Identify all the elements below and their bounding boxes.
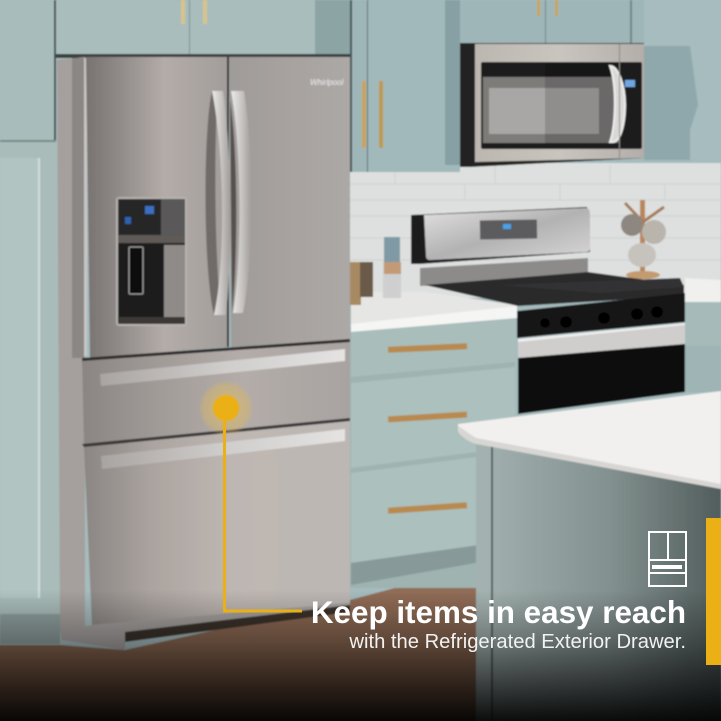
base cabinets	[350, 302, 721, 588]
brand logo: Whirlpool	[310, 78, 344, 87]
icon: fridge with drawers	[649, 532, 686, 586]
water and ice dispenser	[116, 197, 187, 326]
island countertop	[458, 391, 721, 488]
countertop items	[350, 237, 401, 305]
island cabinet face	[476, 440, 721, 721]
upper cabinets	[54, 0, 721, 172]
cabinet pulls	[181, 0, 558, 148]
toe kick	[60, 603, 350, 650]
mug tree	[621, 200, 666, 279]
microwave	[460, 43, 644, 167]
countertop	[351, 278, 721, 332]
upper left door	[86, 57, 228, 358]
door handles	[205, 91, 251, 315]
upper right door	[229, 57, 350, 347]
left cabinet column	[0, 0, 65, 644]
refrigerator	[57, 57, 350, 650]
range	[411, 207, 685, 414]
yellow side accent	[706, 518, 721, 665]
kitchen island	[458, 391, 721, 721]
subheading: with the Refrigerated Exterior Drawer.	[348, 631, 686, 653]
floor	[0, 565, 480, 721]
yellow callout leader line	[198, 380, 302, 611]
headline: Keep items in easy reach	[311, 595, 686, 630]
refrigerated exterior drawer	[82, 341, 350, 444]
bottom vignette	[0, 590, 721, 721]
lower freezer drawer	[84, 420, 350, 625]
fridge side panel	[57, 57, 85, 640]
